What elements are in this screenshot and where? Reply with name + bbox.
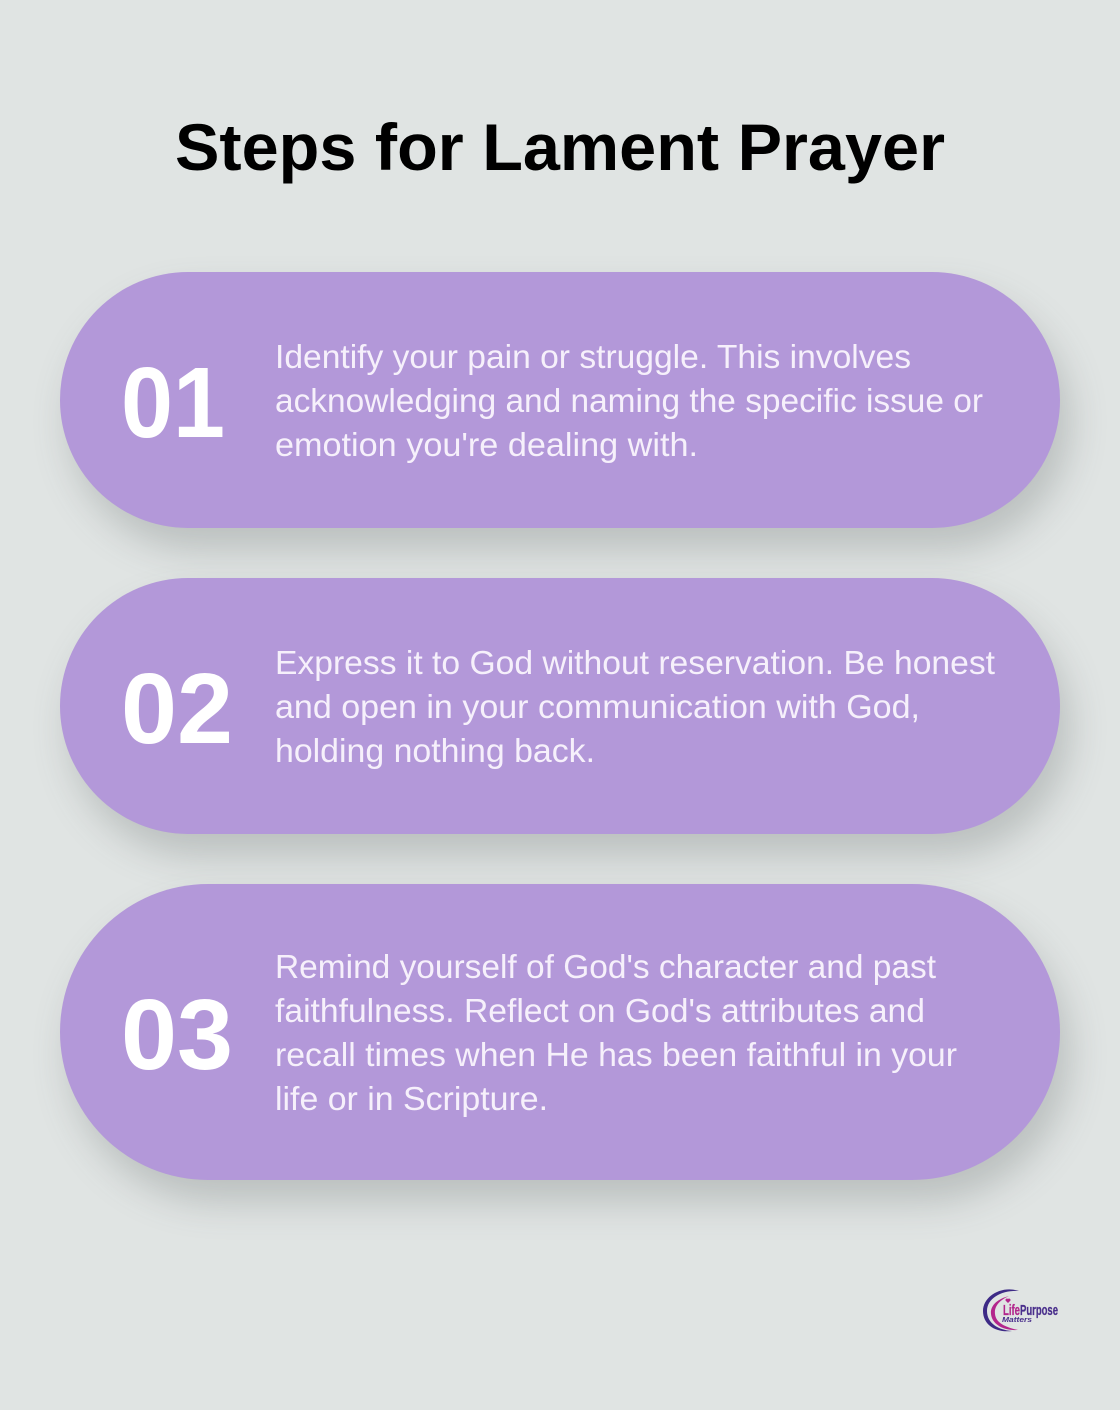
step 2 text: and open in your communication with God, [275, 688, 920, 725]
logo word: Life: Life [1003, 1302, 1020, 1319]
step 2 text: holding nothing back. [275, 732, 595, 769]
step 1 text: acknowledging and naming the specific issue or [275, 382, 983, 419]
logo tagline: Matters [1002, 1317, 1032, 1324]
step 3 text: life or in Scripture. [275, 1080, 548, 1117]
step 1 text [275, 338, 983, 463]
step 3 text [275, 948, 957, 1117]
step 2 text [275, 644, 995, 769]
icon: logo outer arc [983, 1289, 1019, 1331]
step 1 text: emotion you're dealing with. [275, 426, 698, 463]
panel: step 3 pill [60, 884, 1060, 1180]
step 2 number: 02 [121, 653, 233, 765]
step 1 text: Identify your pain or struggle. This involves [275, 338, 911, 375]
icon: logo heart [1005, 1299, 1011, 1303]
logo wordmark [1003, 1302, 1058, 1319]
panel: step 2 pill [60, 578, 1060, 834]
step 3 text: recall times when He has been faithful in your [275, 1036, 957, 1073]
step 2 text: Express it to God without reservation. Be honest [275, 644, 995, 681]
step 3 text: Remind yourself of God's character and past [275, 948, 936, 985]
step 3 text: faithfulness. Reflect on God's attributes and [275, 992, 925, 1029]
logo word: Purpose: Purpose [1020, 1302, 1058, 1319]
panel: step 1 pill [60, 272, 1060, 528]
step 3 number: 03 [121, 979, 233, 1091]
title: Steps for Lament Prayer [175, 110, 945, 184]
logo: Life Purpose Matters [983, 1289, 1058, 1331]
step 1 number: 01 [121, 347, 225, 459]
icon: logo inner arc [991, 1296, 1018, 1330]
